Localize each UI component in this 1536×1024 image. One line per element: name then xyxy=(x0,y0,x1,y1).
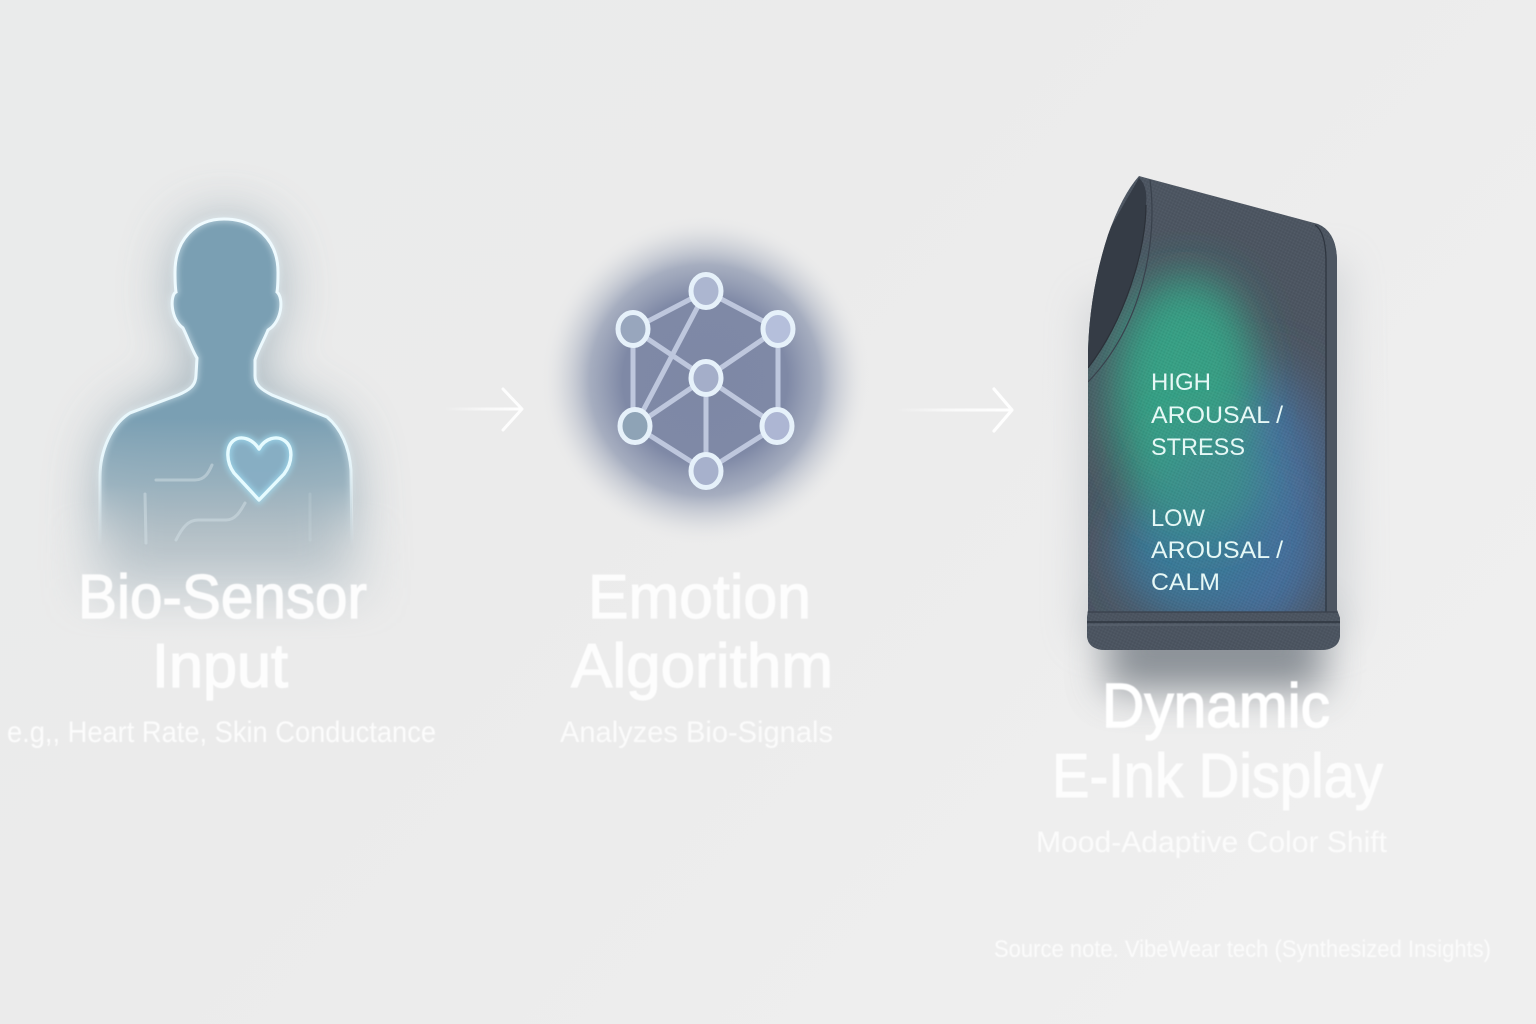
sleeve state labels: LOW xyxy=(1151,505,1205,532)
heading: Bio-Sensor Input xyxy=(78,563,367,701)
icon: human silhouette with heart xyxy=(96,219,356,620)
text: bio-sensor description: e.g,, Heart Rate, Skin Conductance xyxy=(7,716,436,749)
panel: emotion algorithm xyxy=(530,205,880,749)
sleeve state labels: AROUSAL / xyxy=(1151,402,1283,429)
heading: Dynamic E-Ink Display: E-Ink Display xyxy=(1052,742,1383,811)
side seam xyxy=(1315,225,1326,612)
source note: Source note. VibeWear tech (Synthesized Insights) xyxy=(994,936,1491,963)
text: display description: Mood-Adaptive Color Shift xyxy=(1036,826,1388,859)
sleeve state labels: HIGH xyxy=(1151,369,1211,396)
sleeve state labels: STRESS xyxy=(1151,434,1245,461)
heading: Dynamic E-Ink Display xyxy=(1052,672,1383,811)
heading: Emotion Algorithm xyxy=(571,563,833,701)
network nodes xyxy=(618,274,793,488)
text: algorithm description: Analyzes Bio-Signals xyxy=(560,716,833,749)
heading: Emotion Algorithm: Algorithm xyxy=(571,632,833,701)
arrow: algorithm to display xyxy=(895,389,1012,431)
sleeve state labels: CALM xyxy=(1151,569,1220,596)
heading: Bio-Sensor Input: Bio-Sensor xyxy=(78,563,367,632)
fabric colour glow xyxy=(1222,352,1327,612)
panel: bio-sensor input xyxy=(7,219,436,749)
cuff xyxy=(1084,612,1344,652)
heading: Bio-Sensor Input: Input xyxy=(152,632,288,701)
arrow: input to algorithm xyxy=(444,389,522,430)
panel: dynamic e-ink display xyxy=(1036,170,1388,859)
opening trim xyxy=(1088,205,1146,368)
heading: Emotion Algorithm: Emotion xyxy=(588,563,811,632)
icon: circuit traces xyxy=(145,465,310,543)
icon: neural network in glowing orb xyxy=(530,205,880,555)
heading: Dynamic E-Ink Display: Dynamic xyxy=(1102,672,1330,741)
sleeve state labels: AROUSAL / xyxy=(1151,537,1283,564)
sleeve state labels xyxy=(1151,369,1283,596)
network links xyxy=(633,291,778,471)
icon: smart fabric sleeve xyxy=(1080,170,1350,690)
sleeve opening xyxy=(1084,178,1146,368)
icon: heart xyxy=(228,438,291,500)
